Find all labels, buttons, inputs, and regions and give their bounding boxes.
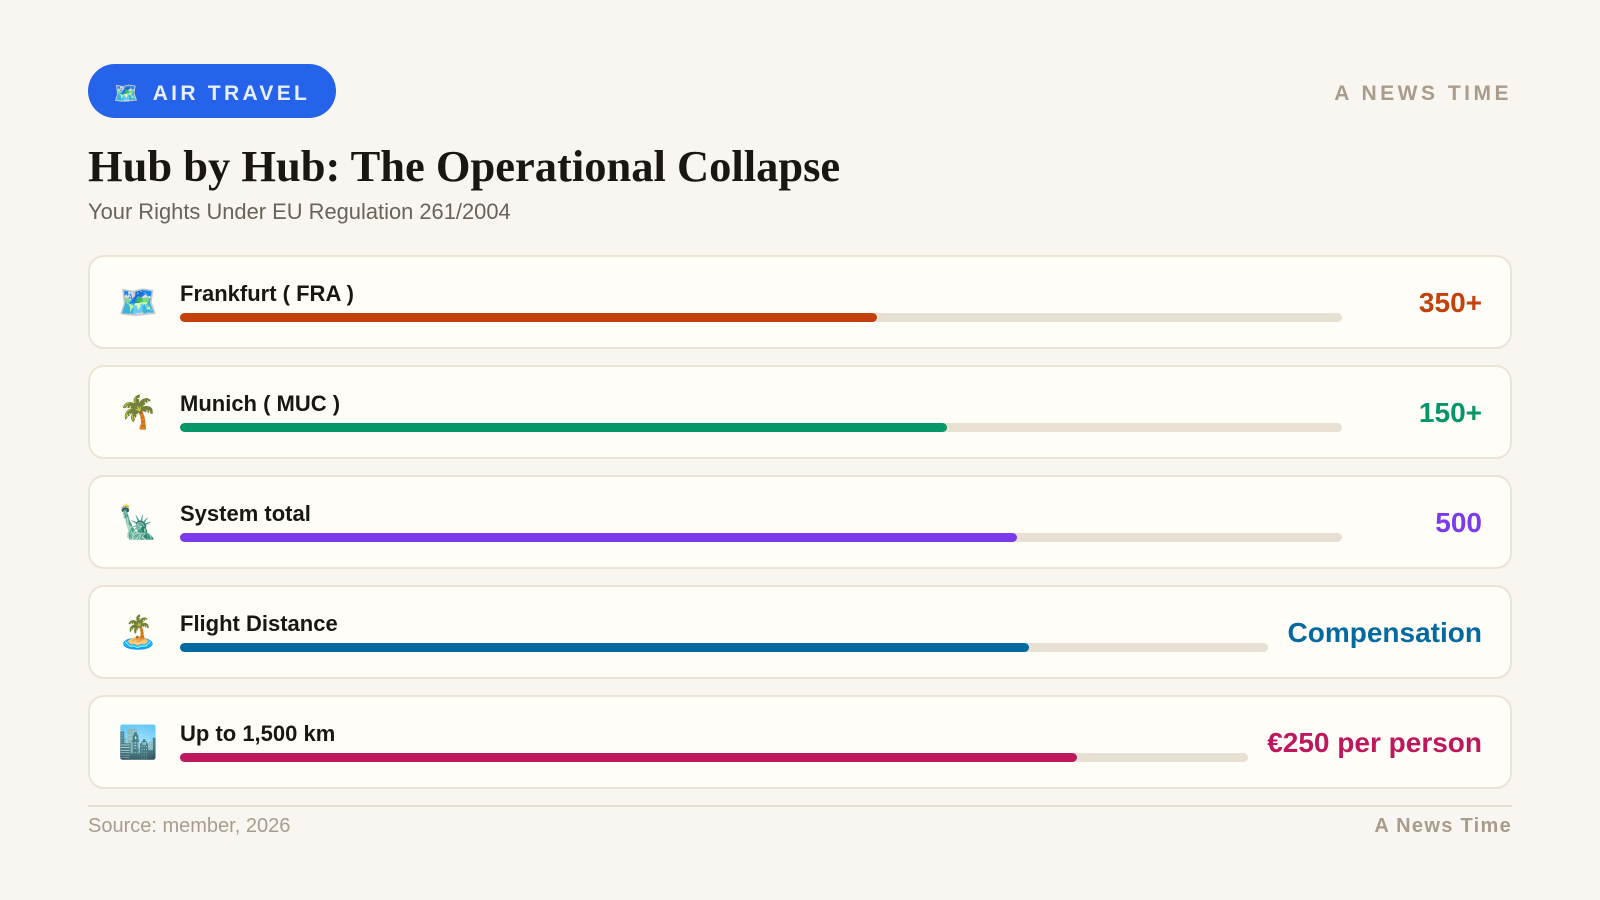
badge: air travel: 🗺️ xyxy=(114,83,139,105)
brand: A NEWS TIME xyxy=(1334,82,1512,105)
bar xyxy=(180,423,1342,432)
icon: palm: 🌴 xyxy=(118,394,158,430)
label: Munich ( MUC ) xyxy=(180,391,340,416)
bar xyxy=(180,643,1268,652)
value: 150+ xyxy=(1419,397,1482,428)
label: Frankfurt ( FRA ) xyxy=(180,281,354,306)
bar xyxy=(180,753,1248,762)
value: €250 per person xyxy=(1267,727,1482,758)
footer brand: A News Time xyxy=(1374,815,1512,837)
subtitle: Your Rights Under EU Regulation 261/2004 xyxy=(88,199,511,224)
value: Compensation xyxy=(1288,617,1482,648)
card: System total xyxy=(88,475,1512,569)
card: Munich xyxy=(88,365,1512,459)
icon: map: 🗺️ xyxy=(118,284,158,320)
label: Up to 1,500 km xyxy=(180,721,335,746)
card: Flight Distance xyxy=(88,585,1512,679)
value: 350+ xyxy=(1419,287,1482,318)
icon: island: 🏝️ xyxy=(118,614,158,650)
label: System total xyxy=(180,501,311,526)
icon: statue: 🗽 xyxy=(118,504,158,540)
value: 500 xyxy=(1435,507,1482,538)
card: Up to 1,500 km xyxy=(88,695,1512,789)
label: Flight Distance xyxy=(180,611,338,636)
bar xyxy=(180,313,1342,322)
icon: city: 🏙️ xyxy=(118,724,158,760)
source: Source: member, 2026 xyxy=(88,815,290,837)
card: Frankfurt xyxy=(88,255,1512,349)
bar xyxy=(180,533,1342,542)
title: Hub by Hub: The Operational Collapse xyxy=(88,141,840,191)
badge: air travel: AIR TRAVEL xyxy=(153,82,310,104)
badge: air travel xyxy=(88,64,336,118)
